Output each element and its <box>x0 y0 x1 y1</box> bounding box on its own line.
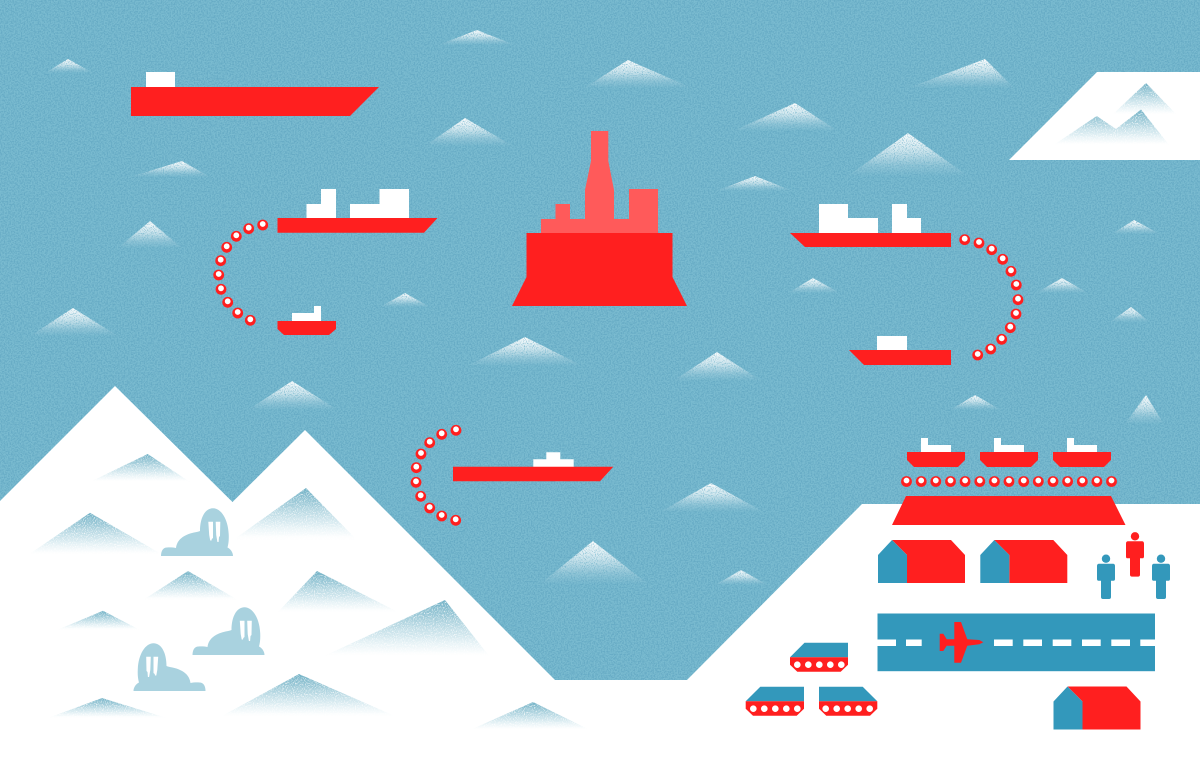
hangar 2 <box>980 540 1067 583</box>
route dots centre <box>411 425 461 526</box>
tracked vehicle top <box>790 643 848 672</box>
icon: mountains on floe <box>1053 83 1177 146</box>
walrus 2 <box>192 607 264 655</box>
route dots harbour <box>901 476 1117 487</box>
top right ice floe <box>1009 72 1200 160</box>
left snowy land <box>0 386 1200 761</box>
tracked vehicle right <box>819 687 877 716</box>
hangar 3 <box>1054 686 1140 730</box>
docked boat 2 <box>980 438 1038 467</box>
docked boat 1 <box>907 438 965 467</box>
person blue left <box>1097 554 1115 599</box>
ship centre <box>453 452 613 481</box>
sea icebergs <box>30 30 1164 585</box>
tracked vehicle left <box>746 687 804 716</box>
pier <box>892 496 1126 525</box>
offshore platform <box>512 131 687 306</box>
route dots left <box>213 220 268 326</box>
person red <box>1126 532 1144 577</box>
small boat left <box>278 306 336 335</box>
cargo ship right <box>790 204 951 247</box>
hangar 1 <box>878 540 965 583</box>
walrus 1 <box>161 508 233 556</box>
cargo ship left <box>278 189 438 233</box>
route dots right <box>959 234 1023 360</box>
docked boat 3 <box>1053 438 1111 467</box>
icon: plane <box>940 622 983 663</box>
runway <box>878 614 1155 671</box>
tanker right <box>849 336 951 365</box>
land mountains <box>28 454 590 730</box>
tanker top left <box>131 72 379 116</box>
person blue right <box>1152 554 1170 599</box>
walrus 3 <box>134 643 206 691</box>
